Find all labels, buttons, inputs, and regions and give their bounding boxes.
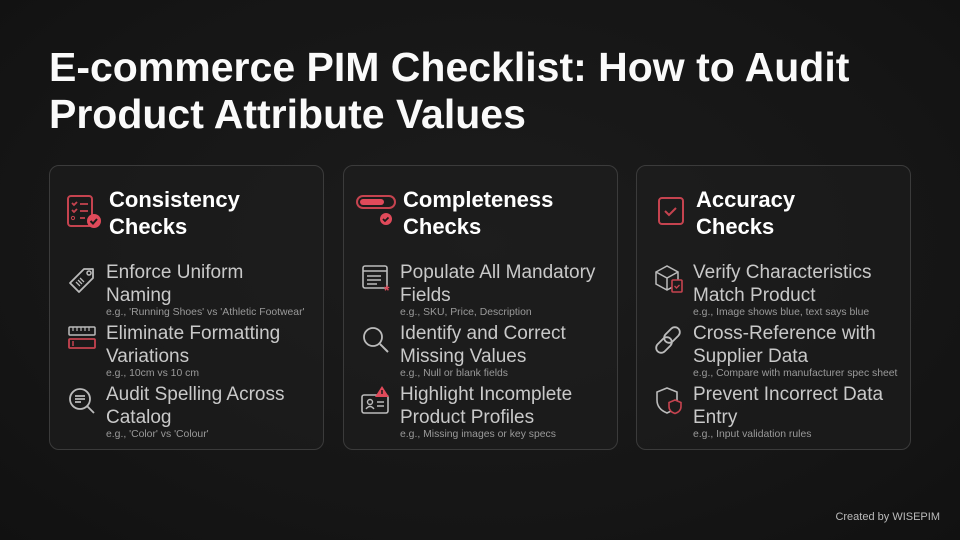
item: naming: Enforce Uniform bbox=[106, 262, 243, 283]
icon: magnifier bbox=[363, 327, 389, 353]
item: formatting bbox=[68, 323, 280, 379]
heading: Completeness bbox=[403, 187, 553, 212]
item: missing: e.g., Null or blank fields bbox=[400, 368, 508, 379]
panel: completeness bbox=[343, 165, 618, 450]
item: formatting: Eliminate Formatting bbox=[106, 323, 280, 344]
item: verify: e.g., Image shows blue, text says blue bbox=[693, 307, 869, 318]
item: naming bbox=[69, 262, 305, 318]
item: profiles bbox=[361, 384, 572, 440]
icon: progress bar bbox=[356, 195, 396, 225]
title bbox=[49, 44, 849, 137]
item: prevent: e.g., Input validation rules bbox=[693, 429, 811, 440]
heading: Checks bbox=[403, 214, 481, 239]
item: formatting: e.g., 10cm vs 10 cm bbox=[106, 368, 199, 379]
icon: profile warning bbox=[361, 386, 389, 414]
item: verify: Verify Characteristics bbox=[693, 262, 871, 283]
heading: Checks bbox=[696, 214, 774, 239]
item: prevent bbox=[656, 384, 884, 440]
item: mandatory bbox=[362, 262, 596, 318]
heading bbox=[403, 187, 553, 239]
item: formatting: Variations bbox=[106, 346, 189, 367]
icon: checkbox bbox=[658, 197, 684, 225]
icon: tag bbox=[69, 268, 94, 293]
item: cross-reference: Cross-Reference with bbox=[693, 323, 876, 344]
item: spelling: e.g., 'Color' vs 'Colour' bbox=[106, 429, 209, 440]
credit: Created by WISEPIM bbox=[835, 511, 940, 523]
item: verify bbox=[655, 262, 871, 318]
item: profiles: Highlight Incomplete bbox=[400, 384, 572, 405]
item: prevent: Entry bbox=[693, 407, 737, 428]
item: verify: Match Product bbox=[693, 285, 816, 306]
icon: box clipboard bbox=[655, 265, 683, 293]
item: naming: Naming bbox=[106, 285, 171, 306]
item: missing: Missing Values bbox=[400, 346, 526, 367]
item: missing: Identify and Correct bbox=[400, 323, 566, 344]
item: profiles: e.g., Missing images or key specs bbox=[400, 429, 556, 440]
item: mandatory: e.g., SKU, Price, Description bbox=[400, 307, 532, 318]
item: profiles: Product Profiles bbox=[400, 407, 534, 428]
icon: form asterisk bbox=[362, 265, 390, 295]
item: naming: e.g., 'Running Shoes' vs 'Athletic Footwear' bbox=[106, 307, 305, 318]
icon: ruler bbox=[68, 326, 96, 349]
item: mandatory: Fields bbox=[400, 285, 451, 306]
heading bbox=[696, 187, 795, 239]
icon: checklist bbox=[67, 195, 101, 228]
item: spelling: Catalog bbox=[106, 407, 172, 428]
icon: link bbox=[655, 326, 681, 354]
item: missing bbox=[363, 323, 566, 379]
panel: consistency bbox=[49, 165, 324, 450]
item: cross-reference bbox=[655, 323, 898, 379]
title: E-commerce PIM Checklist: How to Audit bbox=[49, 44, 849, 90]
item: spelling bbox=[69, 384, 284, 440]
title: Product Attribute Values bbox=[49, 91, 526, 137]
heading: Accuracy bbox=[696, 187, 795, 212]
heading: Consistency bbox=[109, 187, 240, 212]
heading bbox=[109, 187, 240, 239]
icon: shield bbox=[656, 387, 682, 414]
item: spelling: Audit Spelling Across bbox=[106, 384, 284, 405]
panel: accuracy bbox=[636, 165, 911, 450]
item: mandatory: Populate All Mandatory bbox=[400, 262, 595, 283]
icon: search doc bbox=[69, 388, 95, 414]
heading: Checks bbox=[109, 214, 187, 239]
item: cross-reference: Supplier Data bbox=[693, 346, 808, 367]
item: cross-reference: e.g., Compare with manufacturer spec sheet bbox=[693, 368, 897, 379]
item: prevent: Prevent Incorrect Data bbox=[693, 384, 883, 405]
